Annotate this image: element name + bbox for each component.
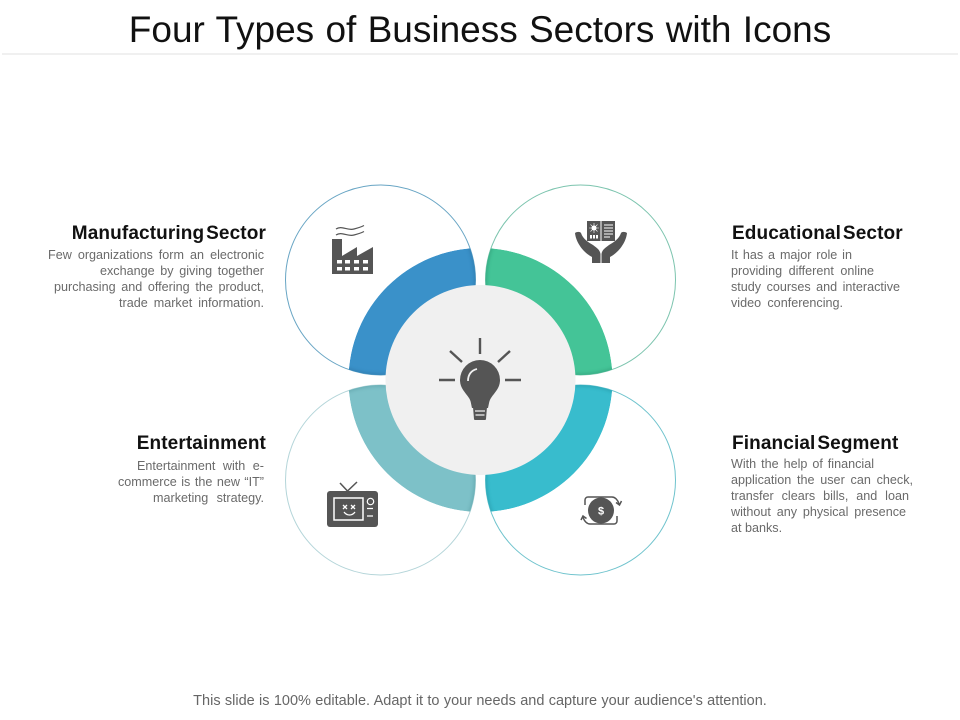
text: at banks. [731, 521, 782, 535]
text: entertainment description [118, 459, 264, 505]
panel: entertainment circle [285, 384, 476, 576]
panel: educational circle [485, 184, 676, 376]
text: study courses and interactive [731, 280, 900, 294]
text: manufacturing description [48, 248, 264, 310]
text: exchange by giving together [100, 264, 264, 278]
title: Four Types of Business Sectors with Icons [129, 9, 831, 50]
panel: manufacturing circle [285, 184, 476, 376]
diagram: four sector circles with central bulb [285, 184, 676, 576]
text: Few organizations form an electronic [48, 248, 264, 262]
heading: entertainment: Entertainment [137, 433, 266, 454]
text: transfer clears bills, and loan [731, 489, 909, 503]
text: It has a major role in [731, 248, 852, 262]
text: marketing strategy. [153, 491, 264, 505]
text: Entertainment with e- [137, 459, 264, 473]
text: purchasing and offering the product, [54, 280, 264, 294]
text: video conferencing. [731, 296, 843, 310]
icon: money exchange: $ [598, 506, 604, 518]
text: commerce is the new “IT” [118, 475, 264, 489]
heading: manufacturing sector: Manufacturing Sector [72, 223, 266, 244]
panel: financial circle [485, 384, 676, 576]
text: application the user can check, [731, 473, 913, 487]
text: financial description [731, 457, 913, 535]
icon: money exchange [581, 497, 622, 524]
text: without any physical presence [731, 505, 906, 519]
icon: television [327, 482, 378, 527]
text: educational description [731, 248, 900, 310]
text: trade market information. [119, 296, 264, 310]
heading: educational sector: Educational Sector [732, 223, 903, 244]
center circle [386, 285, 576, 475]
icon: light bulb [439, 338, 521, 420]
text: providing different online [731, 264, 874, 278]
footer note: This slide is 100% editable. Adapt it to your needs and capture your audience's attention. [193, 693, 767, 709]
icon: factory [332, 226, 373, 274]
icon: hands holding book [575, 221, 627, 263]
heading: financial segment: Financial Segment [732, 433, 898, 454]
text: With the help of financial [731, 457, 874, 471]
